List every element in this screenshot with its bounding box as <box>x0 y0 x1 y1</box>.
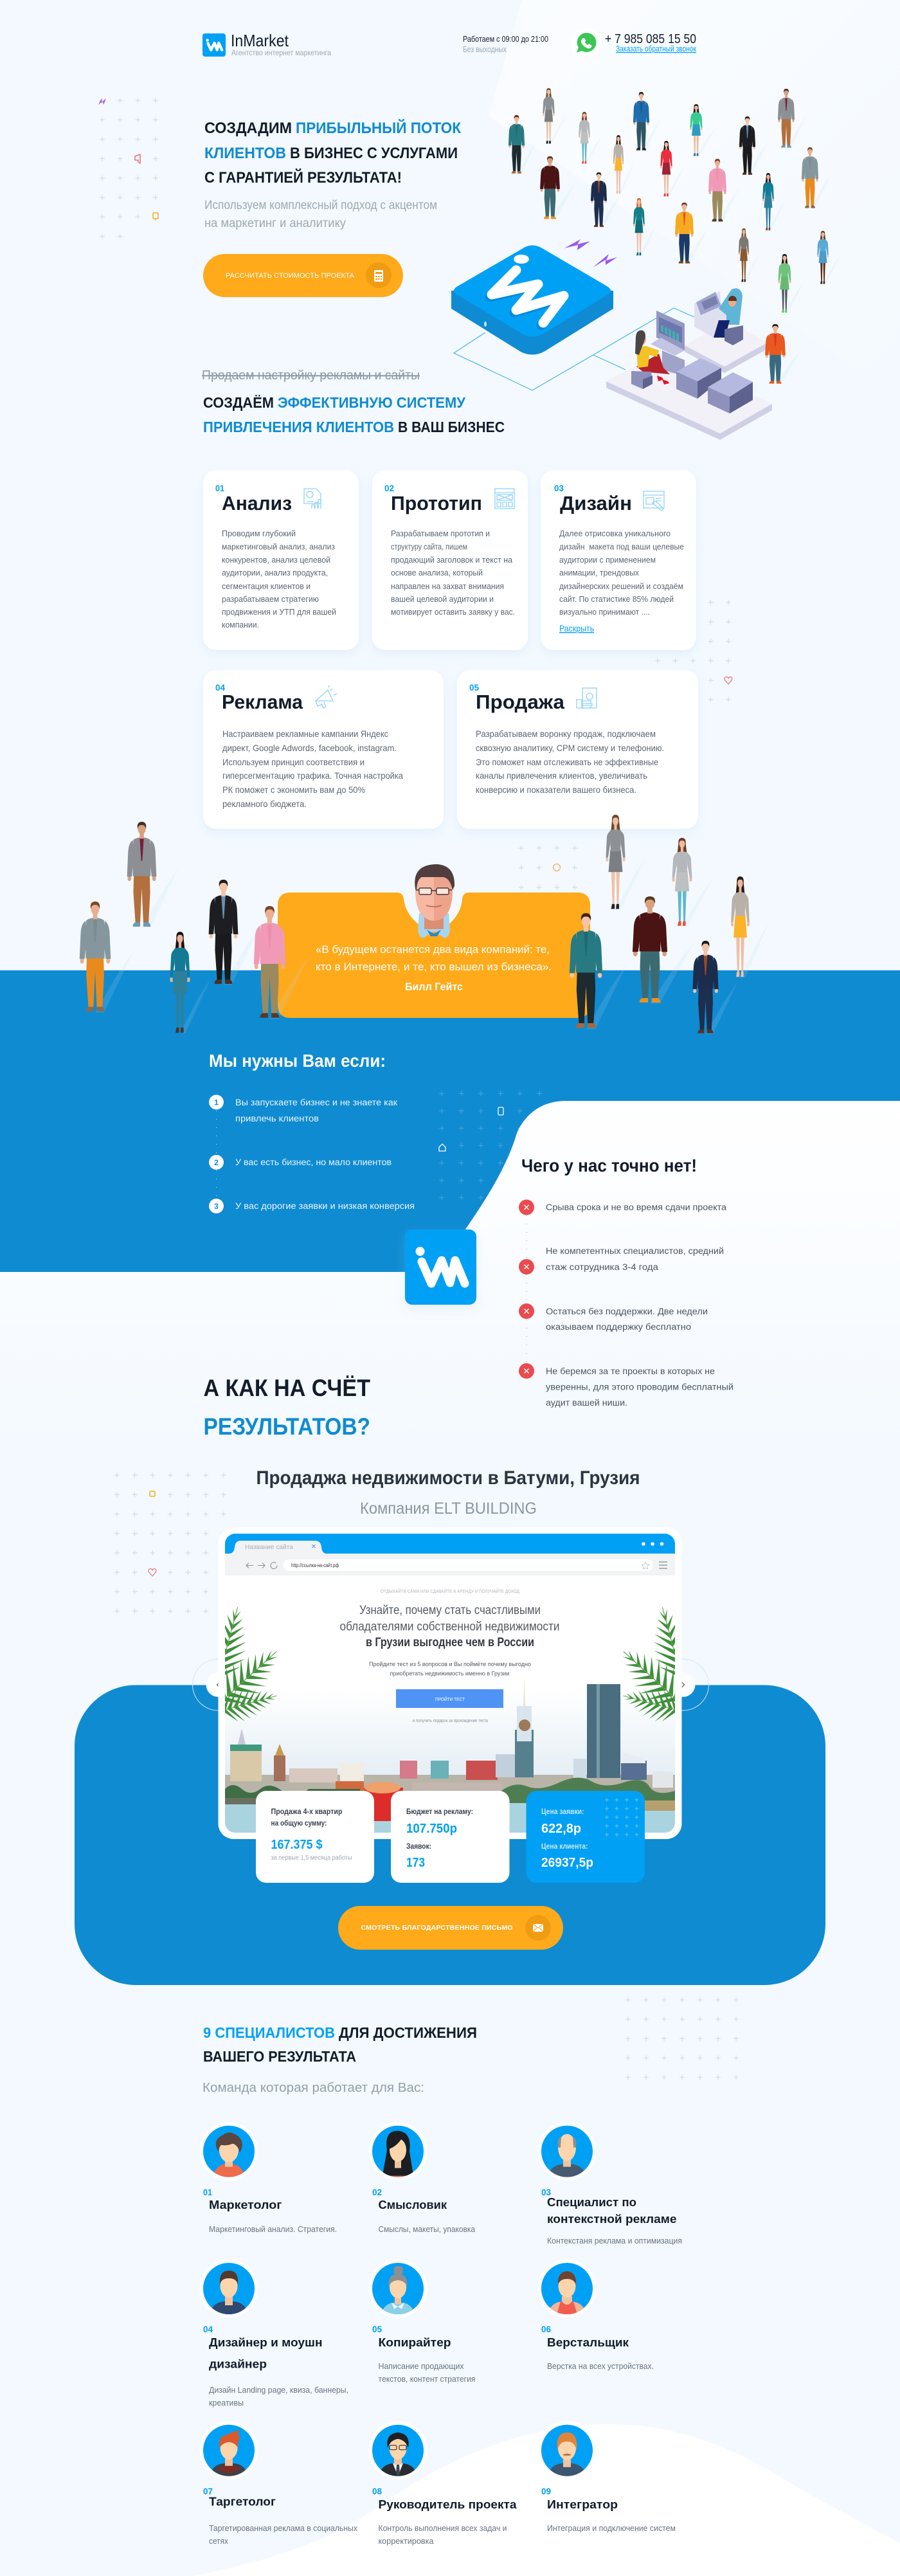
icon: megaphone <box>316 685 337 708</box>
team member: integrator: Интегратор <box>547 2498 618 2511</box>
section heading: system: В ВАШ БИЗНЕС <box>398 419 505 435</box>
worker <box>765 324 801 385</box>
carousel arrow: right <box>657 1659 708 1710</box>
team member: targetologist: Таргетированная реклама в социальных <box>209 2524 358 2533</box>
quote crowd <box>80 815 769 1034</box>
person: coat woman <box>579 112 602 164</box>
quote text: Билл Гейтс <box>405 981 463 993</box>
site eyebrow: ОТДЫХАЙТЕ САМИ ИЛИ СДАВАЙТЕ В АРЕНДУ И ПОЛУЧАЙТЕ ДОХОД <box>381 1588 519 1594</box>
panel: advertising: РК поможет с экономить вам до 50% <box>222 785 365 795</box>
item 1: Срыва срока и не во время сдачи проекта <box>546 1202 727 1212</box>
site headline <box>339 1604 559 1649</box>
hero title: СОЗДАДИМ <box>204 120 292 137</box>
logo name: InMarket <box>231 31 289 50</box>
site description <box>369 1661 531 1677</box>
stat card: budget: 173 <box>406 1856 425 1870</box>
panel: prototype: направлен на захват внимания <box>391 581 504 591</box>
hero title: В БИЗНЕС С УСЛУГАМИ <box>290 145 458 162</box>
team member: designer: дизайнер <box>209 2357 267 2370</box>
heading: Чего у нас точно нет! <box>521 1156 697 1175</box>
browser window dots <box>642 1542 663 1546</box>
person: pink shirt <box>708 159 740 222</box>
logo mark <box>203 33 226 57</box>
team member: copy strategist: Смыслы, макеты, упаковка <box>378 2225 475 2234</box>
isometric logo block <box>451 246 613 355</box>
team member: project lead: Руководитель проекта <box>378 2498 518 2511</box>
stat card: budget: Бюджет на рекламу: <box>406 1807 473 1816</box>
quote text: кто в Интернете, и те, кто вышел из бизнеса». <box>316 961 552 973</box>
panel: design: дизайн макета под ваши целевые <box>559 541 684 552</box>
icon: whatsapp <box>572 28 601 57</box>
site headline: в Грузии выгоднее чем в России <box>366 1636 534 1649</box>
isometric workstations <box>606 288 801 440</box>
woman at desk <box>636 354 670 374</box>
stat card: budget <box>391 1791 509 1883</box>
item 1: 1 <box>214 1098 219 1107</box>
strikethrough tagline: Продаем настройку рекламы и сайты <box>202 368 420 383</box>
team heading <box>203 2024 477 2065</box>
team member: copy strategist: 02 <box>372 2187 382 2197</box>
icon: phone small <box>496 1105 506 1117</box>
section heading: system <box>203 394 505 435</box>
section heading: system: ПРИВЛЕЧЕНИЯ КЛИЕНТОВ <box>203 419 394 435</box>
plus grid: team <box>619 1990 745 2087</box>
panel: prototype: 02 <box>384 483 394 493</box>
team member: context specialist: контекстной рекламе <box>547 2213 676 2226</box>
palm left <box>225 1607 277 1722</box>
stat card: budget: 107.750р <box>406 1822 457 1836</box>
panel: prototype: Разрабатываем прототип и <box>391 529 490 538</box>
avatar <box>537 2122 597 2181</box>
item 3: Остаться без поддержки. Две недели <box>546 1307 708 1316</box>
blue results panel <box>75 1685 825 1985</box>
team member: coder: Верстка на всех устройствах. <box>547 2362 654 2371</box>
team member: integrator: Интеграция и подключение систем <box>547 2524 676 2533</box>
panel: sales: конверсию и показатели вашего бизнеса. <box>476 785 636 795</box>
team heading: 9 СПЕЦИАЛИСТОВ <box>203 2024 335 2041</box>
team member: copywriter: 05 <box>372 2324 382 2334</box>
hero title: ПРИБЫЛЬНЫЙ ПОТОК <box>296 119 461 137</box>
panel: design <box>541 470 696 650</box>
panel: sales <box>457 670 698 829</box>
quote card <box>278 864 590 1018</box>
person: grey suit woman <box>606 815 645 909</box>
person: black suit <box>739 116 768 176</box>
icon: monitor small <box>147 1489 158 1500</box>
panel: advertising <box>203 670 444 829</box>
panel: sales: Разрабатываем воронку продаж, подключаем <box>476 729 656 739</box>
person: beige yellow skirt <box>613 135 634 194</box>
person: black suit <box>209 880 260 985</box>
icon: money <box>577 688 597 708</box>
hero subtitle: Используем комплексный подход с акцентом <box>204 199 437 212</box>
panel: design: Дизайн <box>560 492 632 514</box>
team subtitle: Команда которая работает для Вас: <box>203 2081 424 2095</box>
avatar <box>369 2122 427 2181</box>
team member: copywriter: Написание продающих <box>378 2362 464 2371</box>
item 3: оказываем поддержку бесплатно <box>546 1322 691 1332</box>
hero title: КЛИЕНТОВ <box>204 145 286 162</box>
panel: prototype: продающий заголовок и текст на <box>391 555 513 565</box>
plus grid: cards <box>649 593 737 709</box>
icon: smile small <box>551 862 562 873</box>
person: dark red sweater <box>633 896 694 1004</box>
person: navy suit <box>591 172 619 228</box>
team member: project lead <box>369 2421 518 2546</box>
icon: lightning bolts <box>564 239 617 268</box>
team member: targetologist: 07 <box>203 2486 213 2496</box>
panel: advertising: Настраиваем рекламные кампании Яндекс <box>222 729 388 739</box>
item 2: 2 <box>214 1158 219 1167</box>
stat card: budget: Заявок: <box>406 1842 431 1851</box>
panel: prototype: вашей целевой аудитории и <box>391 594 494 604</box>
team member: coder: Верстальщик <box>547 2336 629 2349</box>
hero crowd <box>509 88 840 313</box>
team member: designer: Дизайнер и моушн <box>209 2336 323 2349</box>
results heading <box>203 1375 370 1440</box>
panel: analysis: Анализ <box>222 492 292 514</box>
item 3 <box>519 1303 708 1332</box>
skyline <box>225 1678 675 1833</box>
panel: advertising: гиперсегментацию трафика. Точная настройка <box>222 770 403 781</box>
panel: sales: Это поможет нам отслеживать не эффективные <box>476 757 658 767</box>
header <box>203 28 696 57</box>
icon: lightning small <box>98 98 106 105</box>
panel: advertising: 04 <box>215 682 225 693</box>
person: teal shirt <box>570 913 627 1029</box>
team member: marketer <box>199 2122 337 2234</box>
person: grey suit woman <box>543 88 567 144</box>
team member: project lead: корректировка <box>378 2537 434 2546</box>
person: blue coat <box>817 231 840 284</box>
item 1 <box>209 1094 397 1123</box>
team member: designer: креативы <box>209 2399 244 2408</box>
upper platform <box>685 343 767 373</box>
section heading: system: СОЗДАЁМ <box>203 394 274 411</box>
team member: designer: 04 <box>203 2324 213 2334</box>
icon: heart small <box>147 1566 158 1578</box>
site headline: обладателями собственной недвижимости <box>339 1620 559 1633</box>
stool <box>631 371 652 389</box>
icon: monitor small <box>150 211 161 222</box>
logo tagline: Агентство интернет маркетинга <box>231 48 331 57</box>
icon: home small <box>437 1142 447 1152</box>
hero button: РАССЧИТАТЬ СТОИМОСТЬ ПРОЕКТА <box>226 272 355 280</box>
panel: analysis: разрабатываем стратегию <box>222 594 319 604</box>
panel: analysis: компании. <box>222 620 259 630</box>
stat card: prices <box>526 1791 645 1883</box>
hero subtitle <box>204 199 437 230</box>
browser mockup <box>199 1527 701 1839</box>
panel: advertising: Реклама <box>222 691 303 713</box>
team member: designer: Дизайн Landing page, квиза, баннеры, <box>209 2386 348 2395</box>
panel: advertising: рекламного бюджета. <box>222 799 307 809</box>
results heading: А КАК НА СЧЁТ <box>203 1375 370 1401</box>
panel: prototype: основе анализа, который <box>391 568 483 577</box>
letter button: СМОТРЕТЬ БЛАГОДАРСТВЕННОЕ ПИСЬМО <box>361 1924 513 1932</box>
panel: analysis: 01 <box>215 483 224 493</box>
panel: design: аудитории с применением <box>559 555 656 565</box>
hero title <box>204 119 461 186</box>
team heading: ДЛЯ ДОСТИЖЕНИЯ <box>339 2024 477 2041</box>
expand link: Раскрыть <box>559 623 594 633</box>
icon: heart small <box>723 675 734 686</box>
person: blue hoodie <box>633 92 662 151</box>
panel: analysis: конкурентов, анализ целевой <box>222 555 330 565</box>
team member: coder <box>537 2260 654 2371</box>
site note: и получить подарок за прохождение теста <box>413 1719 488 1723</box>
panel: sales: 05 <box>469 682 479 693</box>
desk upper <box>694 291 733 338</box>
avatar <box>541 2422 593 2476</box>
team member: targetologist <box>199 2421 358 2546</box>
panel: sales: Продажа <box>476 691 565 713</box>
avatar <box>537 2260 597 2317</box>
section heading: system: ЭФФЕКТИВНУЮ СИСТЕМУ <box>278 394 466 411</box>
panel: prototype: мотивирует оставить заявку у вас. <box>391 607 515 617</box>
stat card: sales <box>256 1791 374 1883</box>
site description: приобретать недвижимость именно в Грузии <box>390 1671 509 1677</box>
item 1 <box>519 1200 727 1215</box>
panel: design: сайт. По статистике 85% людей <box>559 594 674 604</box>
team member: context specialist: 03 <box>541 2187 551 2197</box>
person: teal tee <box>762 173 786 231</box>
person: teal tee <box>170 932 211 1033</box>
panel: design: дизайнерских решений и создаём <box>559 581 683 591</box>
browser tab: Название сайта <box>245 1543 293 1551</box>
carousel arrow: left <box>193 1659 244 1710</box>
panel: design: анимации, трендовых <box>559 568 639 577</box>
person: orange pants <box>80 902 134 1013</box>
browser menu <box>659 1562 667 1568</box>
item 2: У вас есть бизнес, но мало клиентов <box>235 1157 392 1167</box>
panel: prototype: Прототип <box>391 492 482 514</box>
panel: sales: каналы привлечения клиентов, увеличивать <box>476 770 647 781</box>
avatar <box>199 2122 258 2181</box>
working hours: Работаем с 09:00 до 21:00 <box>463 34 548 44</box>
team member: marketer: 01 <box>203 2187 212 2197</box>
icon: megaphone small <box>132 153 143 165</box>
server boxes <box>676 358 721 381</box>
team heading: ВАШЕГО РЕЗУЛЬТАТА <box>203 2048 356 2065</box>
browser nav icons <box>246 1563 277 1569</box>
panel: analysis: продвижения и УТП для вашей <box>222 607 336 617</box>
person: red hair teal dress <box>633 198 656 256</box>
logo block mark <box>490 255 564 325</box>
team member: marketer: Маркетолог <box>209 2199 282 2211</box>
item 3: У вас дорогие заявки и низкая конверсия <box>235 1201 415 1211</box>
avatar <box>199 2421 258 2480</box>
team member: integrator: 09 <box>541 2486 551 2496</box>
team member: targetologist: сетях <box>209 2537 229 2546</box>
team member: copywriter: текстов, контент стратегия <box>378 2375 476 2384</box>
person: red dress <box>660 141 685 197</box>
site description: Пройдите тест из 5 вопросов и Вы поймёте почему выгодно <box>369 1661 531 1668</box>
panel: design: Далее отрисовка уникального <box>559 529 670 538</box>
stat card: prices: Цена заявки: <box>541 1807 584 1816</box>
team member: project lead: Контроль выполнения всех задач и <box>378 2524 507 2533</box>
icon: wireframe <box>495 489 514 509</box>
person: yellow jacket <box>675 203 708 264</box>
panel: design: визуально принимают .... <box>559 607 650 617</box>
person: grey brown woman <box>739 228 760 282</box>
person: cardigan <box>778 89 807 149</box>
team member: marketer: Маркетинговый анализ. Стратегия. <box>209 2225 337 2234</box>
stat card: sales: за первые 1,5 месяца работы <box>271 1854 352 1862</box>
item 2 <box>209 1155 392 1170</box>
decorative light shapes <box>489 0 900 399</box>
panel: advertising: директ, Google Adwords, facebook, instagram. <box>222 743 397 753</box>
person: cardigan <box>127 822 179 928</box>
item 2: Не компетентных специалистов, средний <box>546 1246 724 1256</box>
url bar: http://ссылка-на-сайт.рф <box>291 1563 339 1568</box>
palm right <box>622 1607 675 1722</box>
item 1: Вы запускаете бизнес и не знаете как <box>235 1098 397 1107</box>
site headline: Узнайте, почему стать счастливыми <box>359 1604 541 1617</box>
person: pink shirt <box>254 906 309 1019</box>
team member: copy strategist: Смысловик <box>378 2199 447 2211</box>
person: teal shirt <box>509 115 537 174</box>
panel: prototype: структуру сайта, пишем <box>391 541 467 552</box>
working hours: Без выходных <box>463 44 507 54</box>
stat card: sales: 167.375 $ <box>271 1838 323 1852</box>
browser tab <box>229 1541 327 1554</box>
team member: copy strategist <box>369 2122 475 2234</box>
avatar <box>369 2421 427 2480</box>
person: navy suit <box>692 941 738 1034</box>
stat card: sales: на общую сумму: <box>271 1819 327 1828</box>
case title: Продаджа недвижимости в Батуми, Грузия <box>256 1467 640 1489</box>
person: beige yellow skirt <box>731 876 769 977</box>
item 4: Не беремся за те проекты в которых не <box>546 1366 715 1376</box>
working hours <box>463 34 548 54</box>
panel: advertising: Используем принцип соответствия и <box>222 757 364 767</box>
phone: + 7 985 085 15 50 <box>605 32 696 46</box>
item 2 <box>519 1246 724 1274</box>
callback link: Заказать обратный звонок <box>616 44 696 53</box>
browser top bar <box>225 1534 675 1554</box>
site hero image <box>225 1680 675 1833</box>
hero button <box>203 254 403 297</box>
panel: sales: сквозную аналитику, CPM систему и телефонию. <box>476 743 664 753</box>
panel: design: 03 <box>554 483 564 493</box>
wire outline <box>454 308 694 390</box>
item 3 <box>209 1199 415 1213</box>
team member: copywriter <box>369 2260 476 2384</box>
team member: project lead: 08 <box>372 2486 382 2496</box>
icon: design <box>644 491 664 511</box>
lower platform <box>606 381 772 440</box>
team member: integrator <box>537 2421 676 2533</box>
team member: designer <box>199 2260 348 2408</box>
team member: coder: 06 <box>541 2324 551 2334</box>
stat card: prices: 26937,5р <box>541 1856 593 1870</box>
logo tile <box>405 1229 476 1305</box>
panel: analysis: сегментация клиентов и <box>222 581 310 591</box>
team member: context specialist: Контекстаня реклама и оптимизация <box>547 2236 682 2245</box>
icon: report <box>304 489 321 509</box>
site button <box>396 1689 503 1708</box>
site button: ПРОЙТИ ТЕСТ <box>435 1696 465 1702</box>
item 1: привлечь клиентов <box>235 1114 319 1123</box>
team member: context specialist <box>537 2122 682 2245</box>
item 2: стаж сотрудника 3-4 года <box>546 1262 659 1272</box>
panel: analysis: маркетинговый анализ, анализ <box>222 541 335 552</box>
person: orange pants <box>802 147 831 209</box>
item 4 <box>519 1363 734 1408</box>
stat card: prices: Цена клиента: <box>541 1842 588 1851</box>
stat card: prices: 622,8р <box>541 1822 581 1836</box>
panel: prototype <box>372 470 528 650</box>
avatar <box>369 2260 427 2317</box>
person: green coat <box>779 254 804 313</box>
letter button <box>338 1906 563 1950</box>
plus grid: quote <box>512 839 584 897</box>
results heading: РЕЗУЛЬТАТОВ? <box>203 1413 370 1440</box>
panel: analysis <box>203 470 359 650</box>
team member: copywriter: Копирайтер <box>378 2336 451 2349</box>
quote text <box>316 943 552 993</box>
item 3: 3 <box>214 1202 219 1211</box>
person: dark red sweater <box>540 156 575 219</box>
portrait: Bill Gates <box>415 864 455 938</box>
blue section background <box>0 970 900 1272</box>
avatar <box>199 2260 258 2317</box>
case subtitle: Компания ELT BUILDING <box>360 1500 537 1518</box>
quote text: «В будущем останется два вида компаний: те, <box>316 943 550 956</box>
plus grid: results <box>108 1465 233 1621</box>
heading: Мы нужны Вам если: <box>209 1051 386 1071</box>
team member: context specialist: Специалист по <box>547 2196 636 2209</box>
hero subtitle: на маркетинг и аналитику <box>204 217 346 230</box>
plus grid: hero <box>93 91 165 246</box>
panel: what we do not have <box>519 1156 734 1408</box>
plus grid: blue section <box>432 1085 566 1206</box>
stat card: sales: Продажа 4-х квартир <box>271 1807 342 1816</box>
url bar <box>283 1559 653 1571</box>
hero title: С ГАРАНТИЕЙ РЕЗУЛЬТАТА! <box>204 168 402 186</box>
person: coat woman <box>672 838 713 926</box>
panel: we are needed if <box>209 1051 415 1213</box>
team member: targetologist: Таргетолог <box>209 2495 276 2508</box>
person: green top <box>690 104 715 156</box>
item 4: уверенны, для этого проводим бесплатный <box>546 1383 734 1392</box>
man at desk <box>719 288 742 325</box>
monitor <box>656 311 685 350</box>
item 4: аудит вашей ниши. <box>546 1398 627 1408</box>
panel: analysis: аудитории, анализ продукта, <box>222 568 328 577</box>
panel: analysis: Проводим глубокий <box>222 529 296 538</box>
